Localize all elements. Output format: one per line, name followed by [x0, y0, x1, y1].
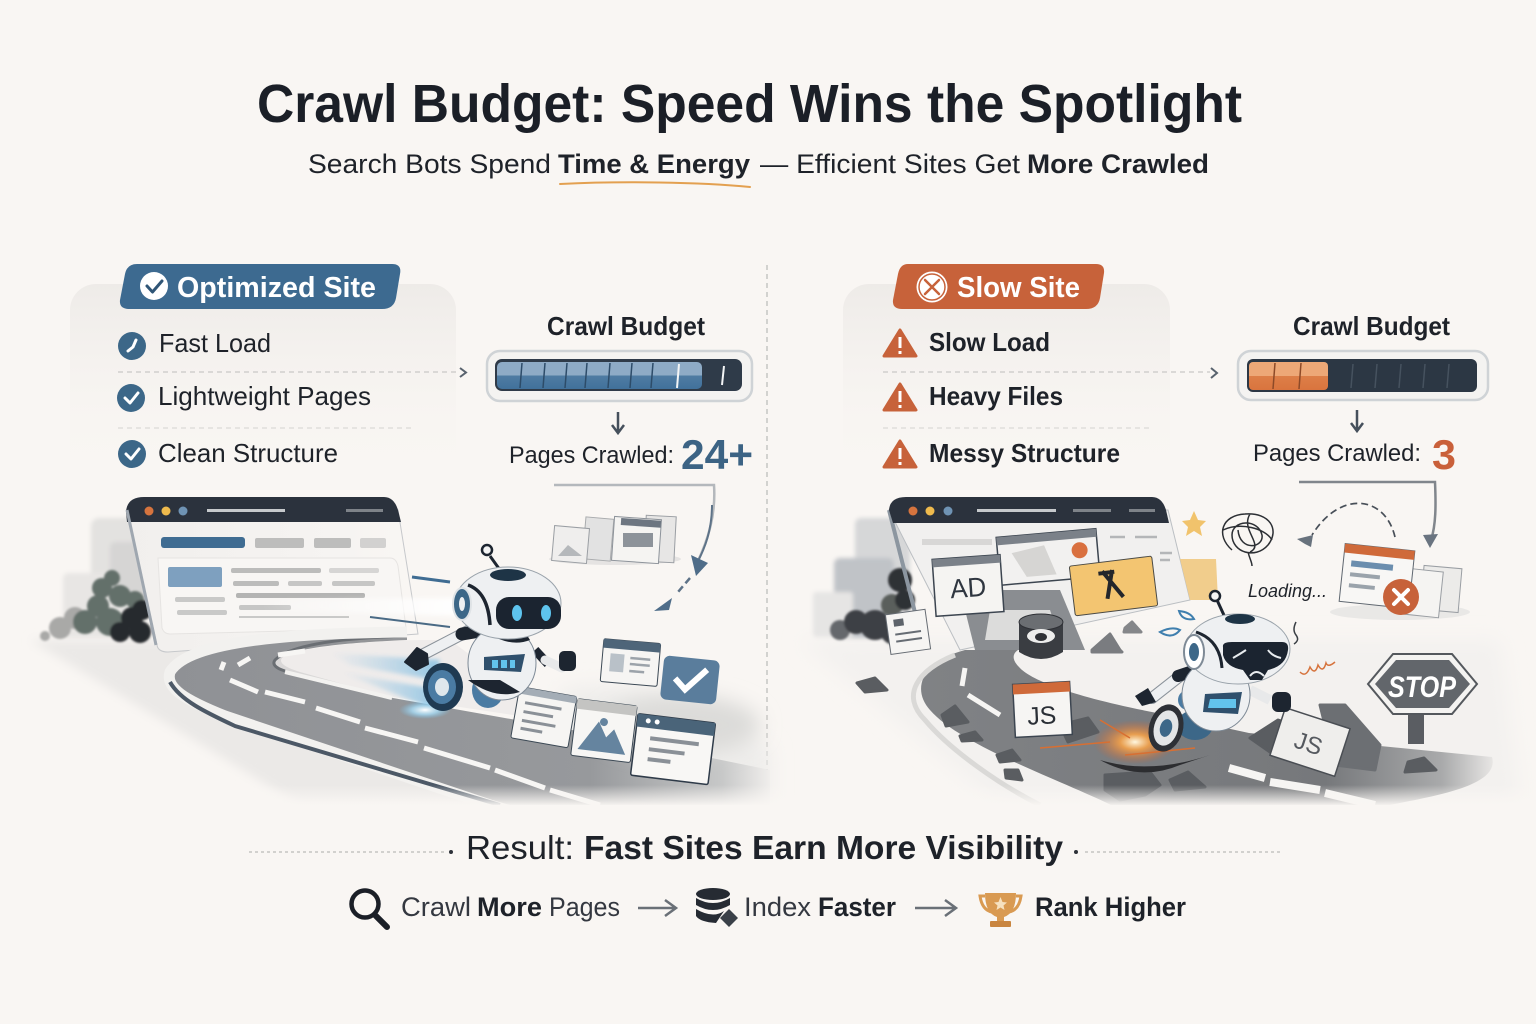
- step: index faster: [744, 892, 896, 922]
- body: [468, 626, 536, 700]
- barrel: [1019, 614, 1063, 659]
- pop-up clutter: [932, 529, 1158, 650]
- badge: Slow Site: [893, 264, 1104, 309]
- stop sign: [1368, 654, 1477, 744]
- rocks: [857, 622, 1436, 800]
- panel: slow site list background: [843, 284, 1170, 484]
- left arm: [1152, 676, 1180, 698]
- loading label: Loading...: [1248, 581, 1327, 601]
- icon: database: [696, 888, 738, 927]
- road: [169, 632, 770, 805]
- step: crawl more pages: Pages: [549, 892, 620, 922]
- crawl budget meter: slow: 3: [1432, 431, 1456, 478]
- result heading: [249, 829, 1280, 866]
- crawl budget meter: optimized: [487, 311, 753, 478]
- badge: Slow Site: Slow Site: [957, 272, 1080, 304]
- arrow: [638, 900, 676, 916]
- small page thumbnails: [549, 515, 681, 565]
- step: index faster: Faster: [818, 892, 896, 922]
- JS box tilted: JS: [1291, 727, 1326, 761]
- ground: [800, 640, 1520, 805]
- curb: [169, 632, 490, 805]
- scene: slow robot on broken road: [800, 482, 1520, 805]
- head: [1186, 614, 1290, 684]
- scribble: [1223, 514, 1273, 566]
- browser window: [126, 497, 418, 652]
- subtitle: Time & Energy: [558, 149, 750, 179]
- step: crawl more pages: [401, 892, 620, 922]
- antenna: [1217, 600, 1228, 624]
- right arm: [535, 650, 548, 664]
- flow arrow: [554, 485, 714, 611]
- subtitle: — Efficient Sites Get: [760, 149, 1021, 179]
- list: slow site problems: Heavy Files: [929, 381, 1063, 411]
- badge: Optimized Site: Optimized Site: [177, 272, 376, 304]
- step: rank higher: Rank Higher: [1035, 892, 1186, 922]
- broken road: [913, 650, 1493, 805]
- wheels: [472, 684, 501, 708]
- right arm: [1250, 690, 1270, 700]
- crawl budget meter: slow: [1238, 311, 1488, 478]
- list: optimized site features: Clean Structure: [158, 438, 338, 468]
- background buildings: [63, 518, 151, 638]
- crawl budget meter: optimized: Crawl Budget: [547, 311, 705, 341]
- lane dashes: [221, 651, 600, 805]
- visor: [1223, 642, 1288, 680]
- debris pile: [830, 568, 915, 645]
- dashed retry arc: [1297, 503, 1395, 547]
- pop-up clutter: AD: [949, 572, 987, 604]
- ground: [45, 641, 436, 794]
- visor: [496, 597, 561, 629]
- result heading: Result:: [466, 829, 574, 866]
- robot: fast: [405, 545, 576, 711]
- scene: fast robot on smooth road: [30, 485, 770, 805]
- crawl budget meter: optimized: 24+: [681, 431, 753, 478]
- crawl budget meter: optimized: Pages Crawled:: [509, 442, 674, 469]
- list: slow site problems: Slow Load: [929, 327, 1050, 357]
- arrow: [915, 900, 956, 916]
- pages arriving: [511, 639, 760, 785]
- icon: magnifier: [352, 890, 387, 927]
- subtitle: More Crawled: [1027, 149, 1209, 179]
- list: optimized site features: [117, 328, 466, 468]
- body: [1182, 659, 1250, 731]
- failed pages: [1330, 544, 1470, 620]
- center divider: [766, 265, 768, 800]
- step: crawl more pages: Crawl: [401, 892, 471, 922]
- panel: optimized site list background: [70, 284, 456, 484]
- step: crawl more pages: More: [477, 892, 542, 922]
- scene bottom fade: [0, 785, 1536, 806]
- antenna: [488, 555, 500, 568]
- wheel: [1178, 690, 1198, 710]
- title: Crawl Budget: Speed Wins the Spotlight: [257, 74, 1242, 134]
- JS box upright: JS: [1027, 701, 1057, 731]
- result heading: Fast Sites Earn More Visibility: [584, 829, 1064, 866]
- list: slow site problems: Messy Structure: [929, 438, 1120, 468]
- speed streaks: [344, 576, 454, 718]
- JS box upright: [1013, 682, 1072, 737]
- list: optimized site features: Fast Load: [159, 328, 271, 358]
- background buildings: [813, 518, 910, 638]
- star: [1182, 511, 1206, 536]
- head: [455, 567, 561, 639]
- step: index faster: Index: [744, 892, 811, 922]
- stop sign: STOP: [1388, 671, 1457, 704]
- outcome flow: [352, 888, 1186, 927]
- JS box tilted: [1270, 708, 1350, 776]
- sweat drops: [1160, 611, 1194, 636]
- impact sparks: [1040, 720, 1210, 772]
- squiggles: [1300, 662, 1335, 674]
- list: optimized site features: Lightweight Pages: [158, 381, 371, 411]
- robot: slow: [1135, 591, 1291, 756]
- icon: trophy: [980, 893, 1021, 927]
- small doc on rubble: [885, 609, 931, 654]
- subtitle: Search Bots Spend: [308, 149, 551, 179]
- flow arrow: [1299, 482, 1438, 548]
- list: slow site problems: [883, 327, 1217, 468]
- orange side banner: [1180, 559, 1218, 600]
- subtitle: [308, 149, 1209, 187]
- browser window: [889, 497, 1190, 650]
- bushes: [40, 570, 152, 643]
- badge: Optimized Site: [120, 264, 400, 309]
- crawl budget meter: slow: Pages Crawled:: [1253, 440, 1421, 467]
- crawl budget meter: slow: Crawl Budget: [1293, 311, 1450, 341]
- left arm: [422, 630, 470, 655]
